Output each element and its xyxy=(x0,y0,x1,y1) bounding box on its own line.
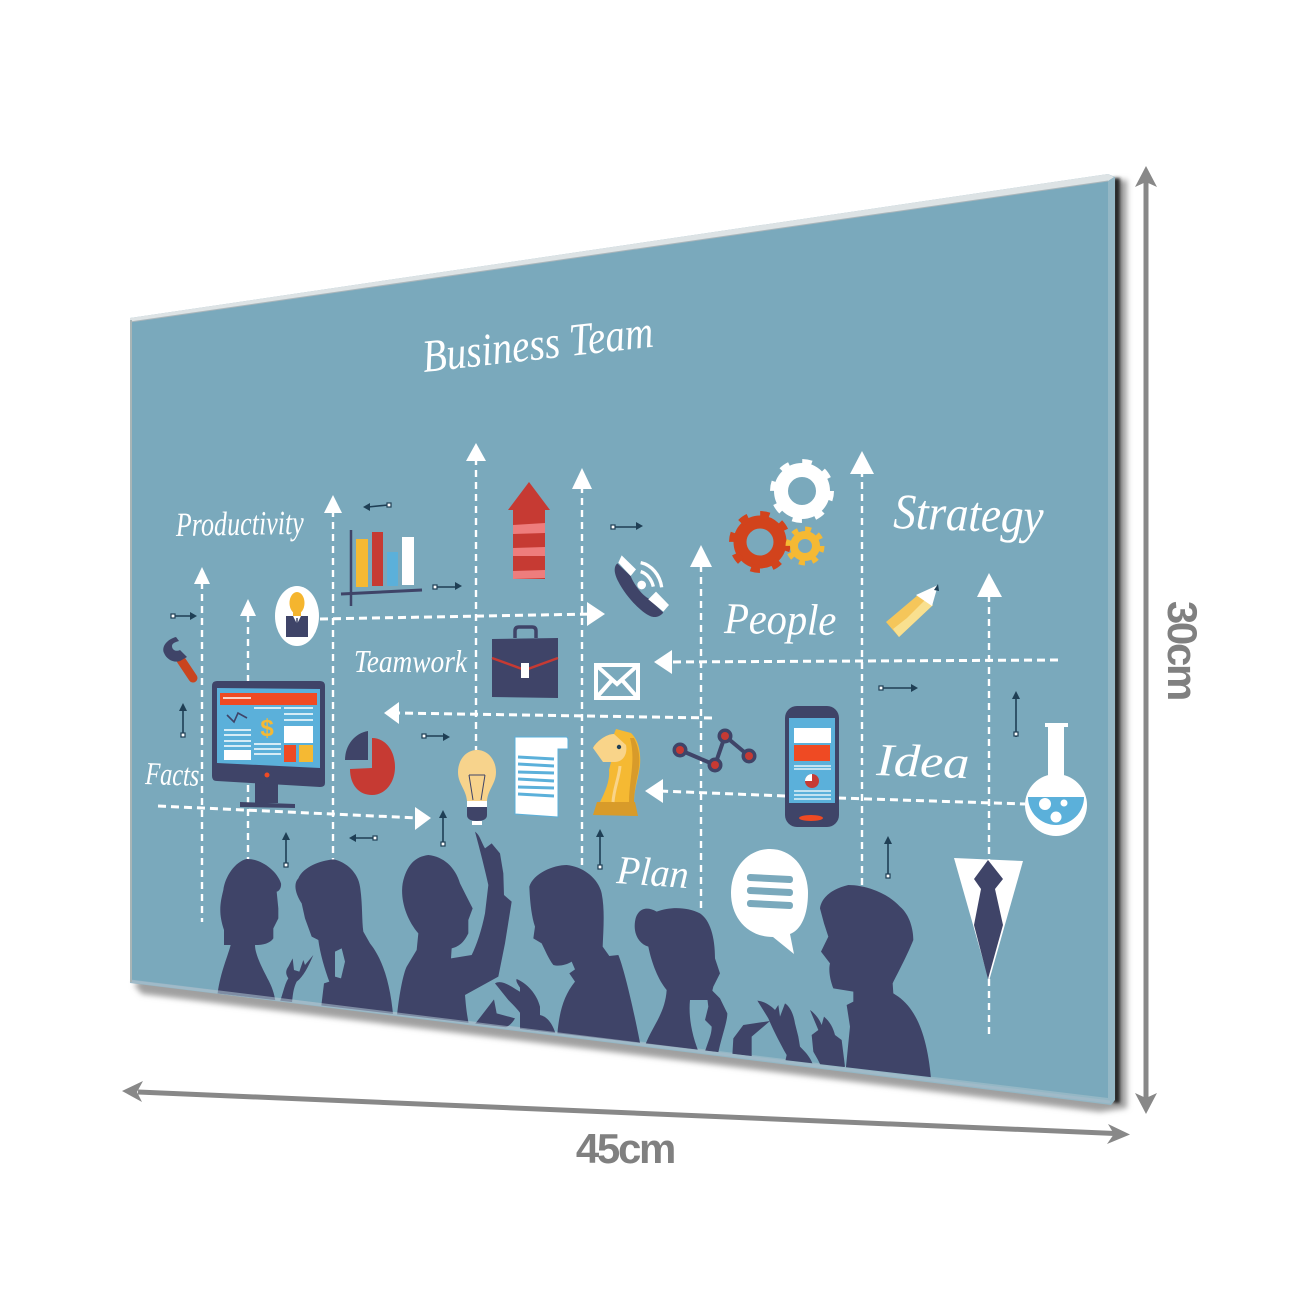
hand 3 xyxy=(475,979,540,1032)
person 6 xyxy=(820,885,932,1087)
panel shadow xyxy=(134,178,1127,1112)
dimension label: 30cm: 30cm xyxy=(1159,601,1206,699)
label: Teamwork: Teamwork xyxy=(354,643,468,679)
icon: envelope xyxy=(596,665,638,698)
icon: light bulb xyxy=(458,750,496,825)
icon: shirt and tie xyxy=(954,858,1023,981)
dimension arrow: width xyxy=(122,1081,1130,1144)
person 4 xyxy=(529,865,642,1053)
icon: lab flask xyxy=(1025,723,1087,836)
person 1 xyxy=(217,859,281,1010)
icon: smartphone xyxy=(785,706,839,827)
wrist 3 xyxy=(520,988,556,1033)
dimension label: 45cm: 45cm xyxy=(576,1125,674,1172)
left silhouettes xyxy=(217,832,540,1040)
icon: desktop monitor: $ xyxy=(260,715,274,742)
big hand xyxy=(757,1000,812,1064)
label: Plan: Plan xyxy=(614,847,690,897)
bar chart xyxy=(341,530,422,606)
icon: telephone xyxy=(615,555,669,617)
person 2 xyxy=(295,859,394,1027)
icon: gears xyxy=(733,464,830,569)
icon: desktop monitor xyxy=(212,681,325,808)
icon: chess knight xyxy=(593,729,640,816)
person 3 xyxy=(396,832,512,1033)
label: People: People xyxy=(723,594,837,645)
icon: briefcase xyxy=(492,627,558,698)
pie chart xyxy=(345,731,395,795)
icon: pencil xyxy=(886,584,939,637)
hand 5 xyxy=(705,990,728,1052)
heading: Business Team: Business Team xyxy=(420,306,656,382)
icon: manager avatar xyxy=(275,586,319,646)
label: Facts: Facts xyxy=(144,755,200,793)
icon: growth arrow xyxy=(508,482,550,579)
icon: network graph xyxy=(672,728,756,772)
label: Strategy: Strategy xyxy=(893,483,1045,544)
dimension arrow: height xyxy=(1135,166,1157,1114)
dashed guide lines xyxy=(158,443,1058,1035)
label: Idea: Idea xyxy=(875,734,970,788)
person 5 xyxy=(635,908,720,1058)
hand 1 xyxy=(280,955,314,1002)
icon: wrench xyxy=(163,637,193,678)
label: Productivity: Productivity xyxy=(175,505,305,544)
right silhouettes xyxy=(520,865,932,1087)
silhouettes of business team xyxy=(217,832,932,1087)
icon: document xyxy=(515,737,568,817)
small process arrows xyxy=(171,503,1020,878)
icon: speech bubble xyxy=(731,849,808,954)
small hand xyxy=(732,1021,770,1056)
glass panel xyxy=(130,174,1115,1105)
hand 7 xyxy=(810,1010,845,1067)
